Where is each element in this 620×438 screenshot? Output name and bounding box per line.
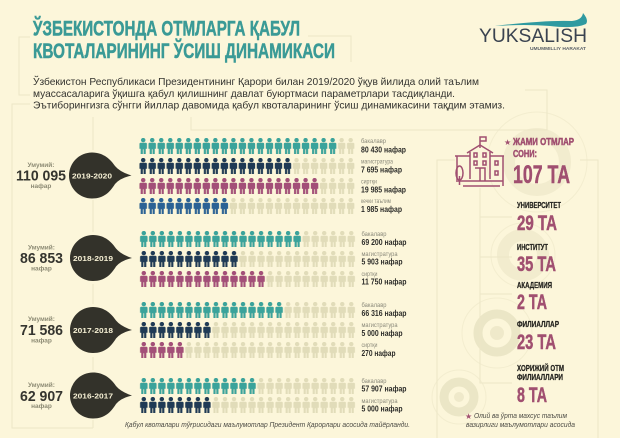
year bubble 2018-2019 [70,235,132,281]
labels 2019-2020: магистратура [361,158,393,166]
intro paragraph: Эътиборингизга сўнгги йиллар давомида қабул квоталарининг ўсиш динамикасини тақдим этамиз. [33,100,505,112]
labels 2018-2019: магистратура [362,251,398,258]
labels 2017-2018: сиртқи [362,342,378,349]
labels 2017-2018: 66 316 нафар [362,309,407,318]
labels 2016-2017: магистратура [362,398,398,405]
labels 2019-2020: 1 985 нафар [361,205,402,214]
footnote: ministry source: вазирлиги маълумотлари асосида [466,421,575,429]
labels 2018-2019: 69 200 нафар [362,238,407,247]
total 2019-2020: 110 095 [16,168,66,184]
year bubble 2019-2020 [69,152,132,198]
intro paragraph: Ўзбекистон Республикаси Президентининг Қарори билан 2019/2020 ўқув йилида олий таълим [33,75,479,88]
labels 2016-2017: 5 000 нафар [362,404,403,414]
intro paragraph [33,75,505,112]
icon: university building [455,137,504,186]
stat: branches: ФИЛИАЛЛАР [517,319,559,329]
labels 2017-2018: 5 000 нафар [362,329,403,338]
footnote: quotas source: Қабул квоталари тўғрисидаги маълумотлар Президент Қарорлари асосида тайёрланди. [125,421,410,429]
pictogram rows 2017-2018 [139,302,356,358]
pictogram rows 2019-2020 [139,138,355,214]
heading: total institutions: 107 ТА [513,161,570,189]
heading: total institutions: ЖАМИ ОТМЛАР [512,137,574,148]
labels 2018-2019: 11 750 нафар [362,278,407,286]
year bubble 2017-2018: 2017-2018 [73,326,113,335]
stat: foreign branches: ХОРИЖИЙ ОТМ [517,362,564,373]
stat: institutes: ИНСТИТУТ [517,242,549,252]
labels 2019-2020: сиртқи [361,178,377,186]
footnote: ministry source: Олий ва ўрта махсус таълим [474,412,567,420]
total 2018-2019: нафар [31,266,52,272]
panel: 2017-2018 [20,301,407,358]
title [32,16,335,63]
title: КВОТАЛАРИНИНГ ЎСИШ ДИНАМИКАСИ [33,39,335,63]
logo: Yuksalish: YUKSALISH [479,25,587,47]
labels 2019-2020: 19 985 нафар [361,186,406,194]
panel: 2018-2019 [20,230,407,287]
stat: branches: 23 ТА [517,331,556,354]
year bubble 2019-2020: 2019-2020 [72,172,112,180]
pictogram rows 2018-2019 [139,231,356,287]
total 2019-2020 [16,161,66,190]
heading: total institutions: СОНИ: [513,149,537,160]
year bubble 2018-2019: 2018-2019 [73,254,113,263]
heading: total institutions: ★ [504,138,511,147]
total 2016-2017: 62 907 [20,388,63,405]
total 2018-2019: Умумий: [28,244,55,252]
logo: Yuksalish: UMUMMILLIY HARAKAT [530,46,586,51]
labels 2018-2019: 5 903 нафар [362,258,403,266]
labels 2018-2019: бакалавр [362,230,387,238]
total 2017-2018: 71 586 [20,322,63,339]
labels 2019-2020: 7 695 нафар [361,166,402,174]
total 2018-2019: 86 853 [20,250,63,267]
labels 2016-2017 [362,377,407,414]
labels 2017-2018: 270 нафар [362,349,396,358]
year bubble 2017-2018 [70,307,132,353]
labels 2018-2019: сиртқи [362,271,378,278]
labels 2016-2017: 57 907 нафар [362,384,407,394]
stat: foreign branches [517,362,564,407]
stat: universities: УНИВЕРСИТЕТ [517,200,562,210]
stat: institutes: 35 ТА [517,253,556,276]
stat: foreign branches: ФИЛИАЛЛАРИ [517,372,563,382]
stat: institutes [517,242,556,276]
total 2019-2020: Умумий: [28,161,54,169]
total 2016-2017 [20,381,63,410]
labels 2017-2018: магистратура [362,322,398,329]
stat: academies: 2 ТА [517,291,547,314]
stat: universities [517,200,562,235]
panel: 2016-2017 [20,372,407,418]
logo: Yuksalish [479,13,587,51]
total 2017-2018 [20,315,63,344]
stat: branches [517,319,559,354]
stat: academies [517,280,552,314]
labels 2018-2019 [362,230,407,286]
footnote: ministry source: ★ [465,412,472,421]
total 2016-2017: Умумий: [28,381,55,389]
title: ЎЗБЕКИСТОНДА ОТМЛАРГА ҚАБУЛ [32,16,300,40]
year bubble 2016-2017: 2016-2017 [73,392,113,400]
stat: academies: АКАДЕМИЯ [517,280,552,290]
stat: foreign branches: 8 ТА [517,384,547,407]
labels 2017-2018 [362,301,407,358]
heading: total institutions [504,137,574,189]
labels 2019-2020: бакалавр [361,137,386,145]
footnote: ministry source [465,412,575,429]
stat: universities: 29 ТА [517,212,557,235]
total 2017-2018: Умумий: [28,315,55,323]
labels 2019-2020: кечки таълим [361,198,391,205]
total 2017-2018: нафар [31,338,52,344]
pictogram rows 2016-2017 [139,378,356,413]
total 2018-2019 [20,244,63,272]
panel: 2019-2020 [16,137,406,214]
year bubble 2016-2017 [70,372,132,418]
labels 2016-2017: бакалавр [362,377,387,385]
intro paragraph: муассасаларига ўқишга қабул қилишнинг давлат буюртмаси параметрлари тасдиқланди. [33,88,455,100]
labels 2017-2018: бакалавр [362,301,387,309]
labels 2019-2020: 80 430 нафар [361,146,406,154]
labels 2019-2020 [361,137,406,214]
total 2019-2020: нафар [31,183,51,190]
total 2016-2017: нафар [31,403,52,410]
